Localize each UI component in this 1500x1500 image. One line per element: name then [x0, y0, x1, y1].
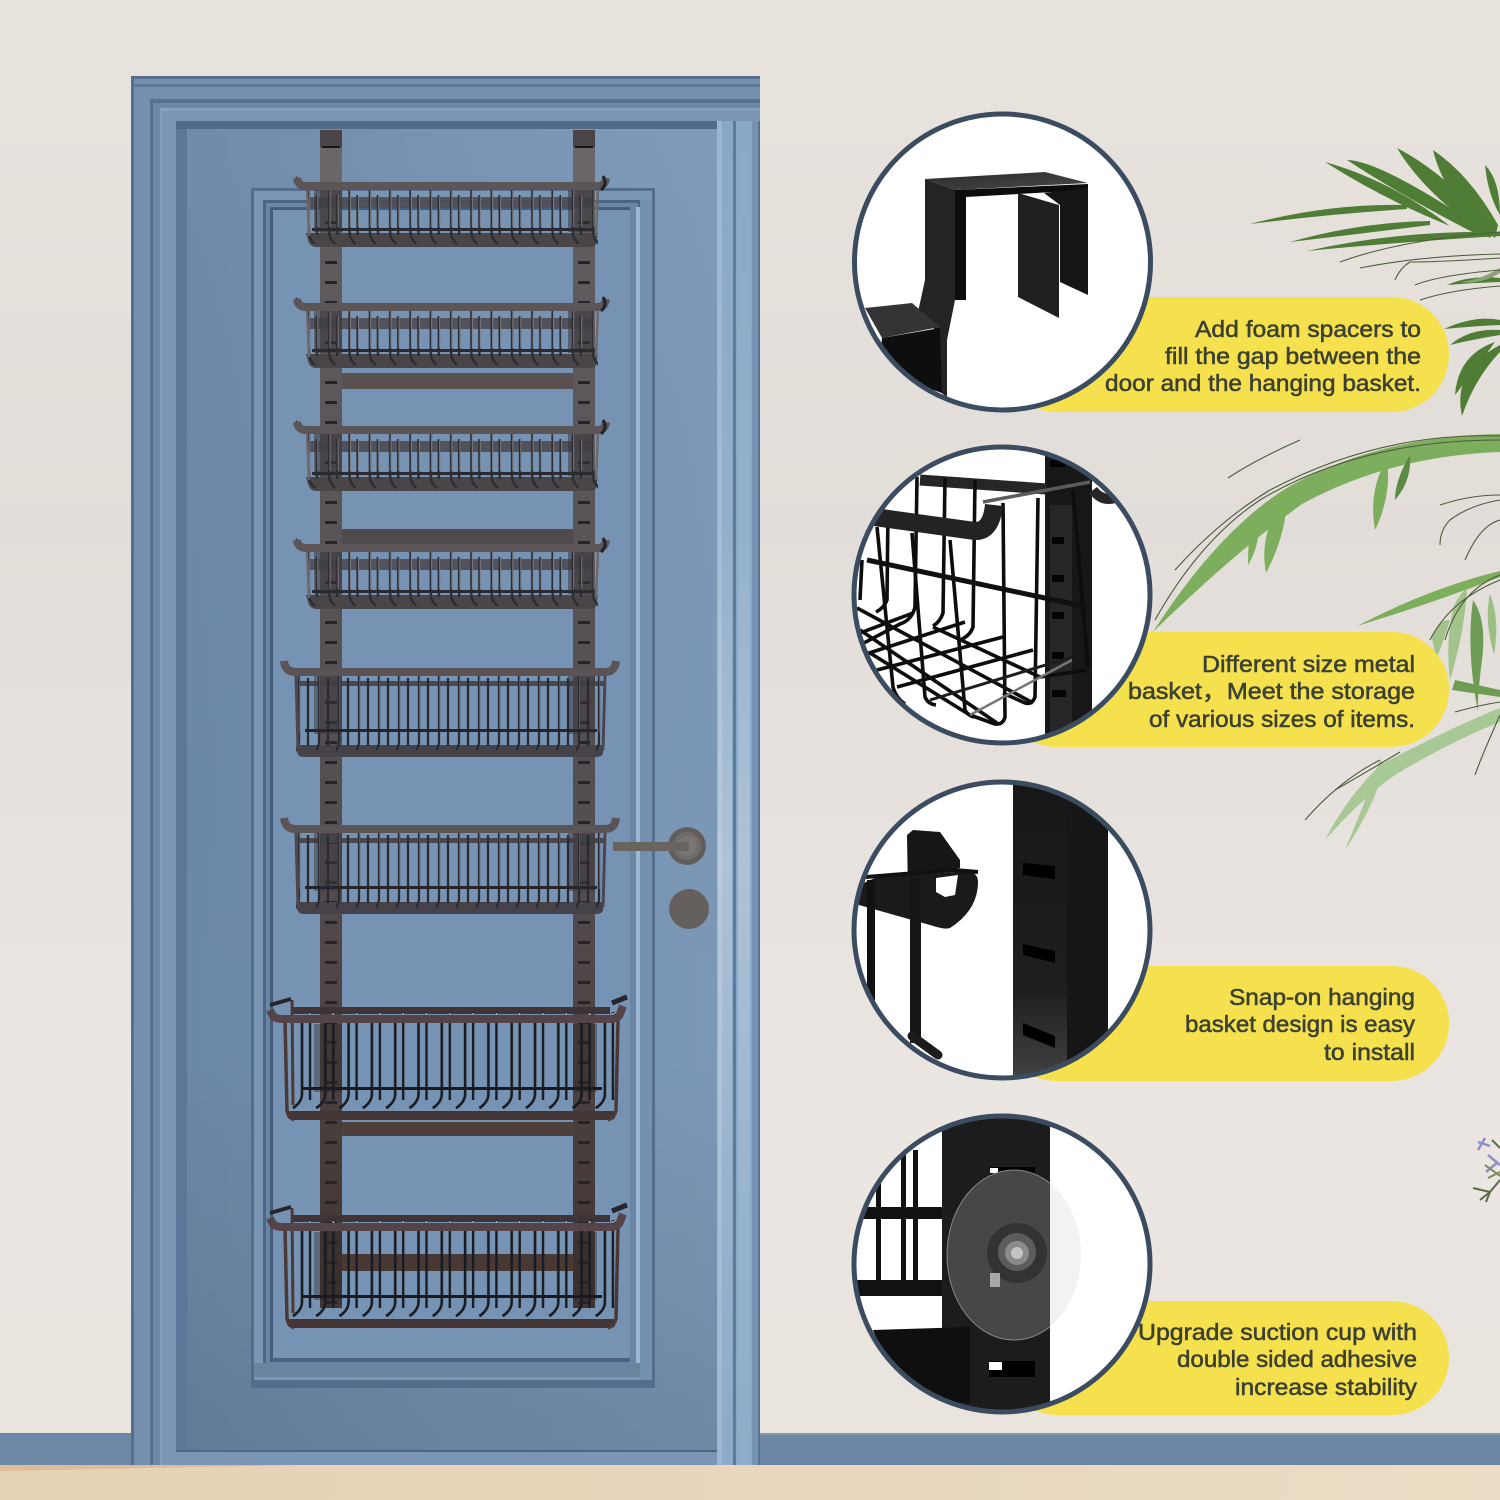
text block 1: fill the gap between the [1165, 343, 1421, 369]
door lock [669, 889, 709, 929]
basket 2 [296, 297, 606, 368]
label pill 3 [1000, 966, 1449, 1081]
basket 1 [296, 176, 606, 247]
plant: lavender sprig [1473, 1138, 1500, 1202]
text block 2: basket，Meet the storage [1128, 678, 1415, 704]
text block 3: basket design is easy [1185, 1011, 1416, 1037]
door handle [613, 827, 706, 865]
callout 1: foam spacers [854, 114, 1449, 412]
cross bars [342, 373, 573, 1271]
baseboard [0, 1433, 1500, 1465]
text block 3: to install [1324, 1039, 1415, 1065]
text block 4: increase stability [1235, 1374, 1418, 1400]
text block 4 [1138, 1319, 1418, 1400]
text block 4: Upgrade suction cup with [1138, 1319, 1417, 1345]
text block 3 [1185, 984, 1416, 1065]
text block 3: Snap-on hanging [1229, 984, 1415, 1010]
door frame right jamb [717, 121, 760, 1465]
basket 5 [284, 661, 616, 760]
door leaf [176, 121, 717, 1452]
callout 2: metal basket [854, 447, 1449, 747]
door frame [131, 76, 760, 1465]
basket 8 [270, 1205, 627, 1328]
label pill 1 [1000, 297, 1449, 412]
basket 6 [284, 818, 616, 917]
text block 4: double sided adhesive [1177, 1346, 1417, 1372]
wooden floor [0, 1452, 1500, 1500]
basket 7 [270, 997, 627, 1120]
organizer rails [320, 130, 595, 1308]
door panel moulding [251, 188, 655, 1388]
basket 3 [296, 420, 606, 491]
zoom circle 2: wire basket [854, 447, 1150, 743]
basket 4 [296, 538, 606, 609]
text block 1: Add foam spacers to [1195, 316, 1421, 342]
text block 1: door and the hanging basket. [1105, 370, 1421, 396]
text block 2 [1128, 651, 1415, 732]
zoom circle 1: door hook [854, 114, 1150, 410]
callout 4: suction cup [854, 1110, 1449, 1420]
callout 3: snap-on [854, 775, 1449, 1085]
text block 2: of various sizes of items. [1149, 706, 1415, 732]
label pill 4 [1000, 1301, 1449, 1415]
zoom circle 3: hook and rail [854, 775, 1150, 1085]
text block 2: Different size metal [1202, 651, 1415, 677]
text block 1 [1105, 316, 1421, 396]
zoom circle 4: suction cup [854, 1110, 1150, 1420]
label pill 2 [1000, 632, 1449, 747]
plant: palm fronds [1153, 148, 1500, 850]
